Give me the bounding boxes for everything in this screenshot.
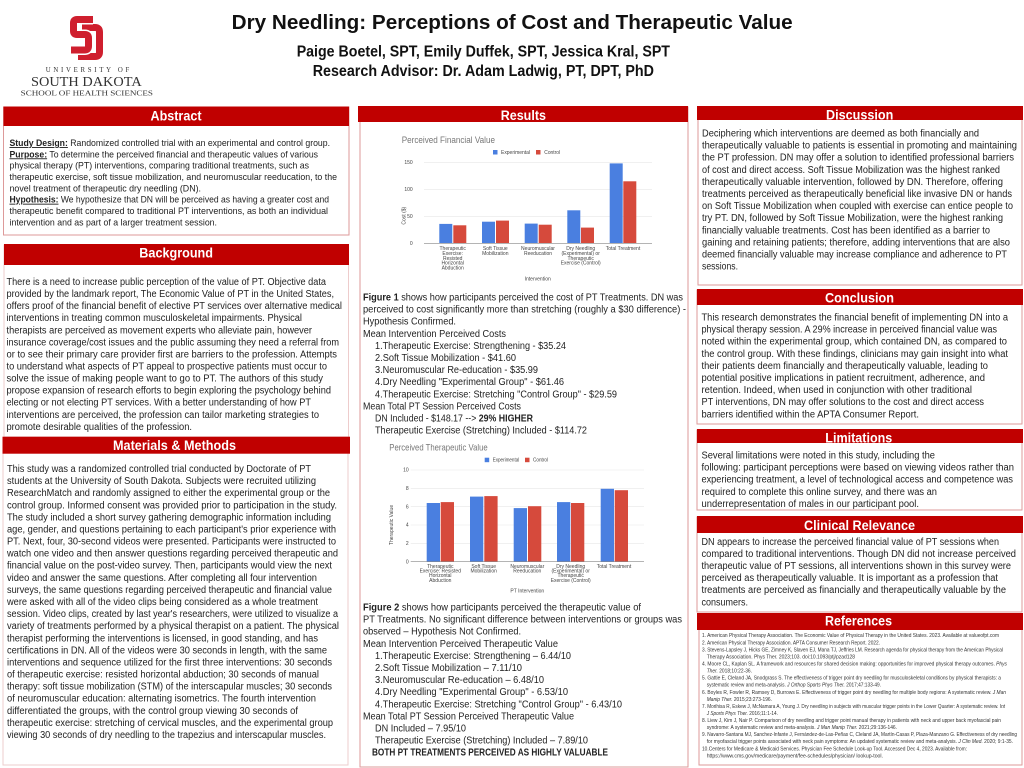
- text: reference list: Therapy Association. Phys Ther. 2023;103. doi:10.1093/ptj/pzad128: [707, 654, 855, 660]
- text: figure 1 description: 4.Therapeutic Exercise: Stretching "Control Group" - $29.59: [375, 389, 617, 400]
- text: discussion body: gaining and retaining patients; therefore, adding interventions that are also: [702, 237, 1011, 248]
- y axis labels: 100: [404, 187, 413, 193]
- text: conclusion body: noted within the experimental group, which contained DN, as compared to: [702, 337, 1008, 348]
- text: background body: There is a need to increase public perception of the value of PT. Objective data: [6, 277, 327, 288]
- text: reference list: [702, 633, 1017, 759]
- x axis labels: (Experimental) or: [562, 251, 600, 257]
- text: limitations body: underrepresentation of males in our participant pool.: [702, 499, 919, 510]
- x axis labels: Therapeutic: [427, 564, 454, 570]
- text: reference list: Ther. 2018;10:22-36.: [707, 669, 752, 675]
- text: methods body: of therapeutic exercise: resisted horizontal abduction; 30 seconds of manual: [7, 670, 319, 680]
- x axis labels: Horizontal: [429, 573, 452, 579]
- text: methods body: interventions and sequence utilized for the first three interventions: 30 seconds: [7, 657, 332, 668]
- text: methods body: therapist performing the interventions is licensed, in good standing, and has: [7, 633, 318, 644]
- text: background body: interventions are perceived, the profession can tailor marketing strategies to: [6, 410, 320, 421]
- heading: background: Background: [139, 245, 213, 260]
- x axis labels: [420, 564, 632, 584]
- y axis labels: 2: [406, 541, 409, 547]
- text: limitations body: Several limitations were noted in this study, including the: [702, 450, 936, 462]
- text: reference list: 4. Moore CL, Kaplan SL. A framework and resources for shared decision making: opportunities for improved physical therapy outcomes. Phys: [702, 662, 1007, 668]
- x axis labels: Soft Tissue: [471, 564, 496, 570]
- x axis labels: Dry Needling: [556, 564, 585, 570]
- text: figure 1 description: 1.Therapeutic Exercise: Strengthening - $35.24: [375, 341, 566, 352]
- text: figure 1 description: Mean Total PT Session Perceived Costs: [363, 401, 521, 412]
- text: methods body: video and answer the same questions. After completing all four intervention: [7, 573, 317, 584]
- text: reference list: 6. Boyles R, Fowler R, Ramsey D, Burrows E. Effectiveness of trigger point dry needling for multiple body regions: A systematic review. J Man: [702, 690, 1006, 696]
- panel: discussion: [697, 106, 1023, 285]
- text: conclusion body: potential positive implications in patient recruitment, adherence, and: [702, 373, 985, 384]
- panel: materials and methods: [2, 437, 350, 765]
- x axis labels: Dry Needling: [566, 246, 595, 252]
- text: background body: to understand what aspects of PT appeal to prospective patients must occur to: [6, 362, 328, 372]
- x axis labels: Therapeutic: [439, 246, 466, 252]
- text: methods body: were asked with all of the video clips being considered as a whole treatment: [6, 597, 318, 608]
- panel: results: [358, 106, 688, 767]
- y axis labels: 0: [406, 559, 409, 565]
- text: figure 2 description: 4.Therapeutic Exercise: Stretching "Control Group" - 6.43/10: [375, 699, 623, 710]
- x axis labels: Mobilization: [470, 569, 497, 575]
- y axis labels: 10: [403, 468, 409, 474]
- x axis labels: Resisted: [443, 256, 463, 262]
- text: discussion body: treatments perceived as therapeutically beneficial like invasive DN or hands: [702, 189, 1012, 200]
- panel: limitations: [697, 429, 1023, 510]
- x axis labels: [439, 246, 641, 272]
- text: conclusion body: barriers identified within the APTA Consumer Report.: [702, 409, 919, 420]
- panel: background: [4, 244, 349, 437]
- logo text: UNIVERSITY OF: [46, 67, 130, 74]
- chart legend: Experimental: [493, 457, 519, 463]
- x axis labels: Horizontal: [441, 261, 464, 267]
- y axis labels: 6: [406, 504, 409, 510]
- text: background body: provided by the landmark report, The Economic Value of PT in the United States,: [6, 289, 334, 300]
- text: methods body: watch one video and then answer questions regarding perceived therapeutic and: [6, 549, 338, 560]
- text: background body: [6, 277, 342, 433]
- text: figure 2 description: 2.Soft Tissue Mobilization – 7.11/10: [375, 663, 523, 674]
- text: reference list: J Sports Phys Ther. 2016;11:1-14.: [706, 711, 778, 717]
- text: clinical relevance body: perceived as therapeutically valuable. It is important as a profession that: [702, 573, 998, 584]
- text: limitations body: [702, 450, 1014, 510]
- text: discussion body: on Soft Tissue Mobilization when coupled with exercise can entice people to: [702, 201, 1014, 212]
- chart title: Perceived Therapeutic Value: [389, 443, 488, 454]
- text: figure 1 description: [363, 292, 686, 437]
- logo text: [21, 67, 153, 97]
- text: clinical relevance body: [702, 537, 1016, 608]
- x axis labels: (Experimental) or: [552, 569, 590, 575]
- text: discussion body: Deciphering which interventions are deemed as both financially and: [702, 128, 979, 140]
- logo: University of South Dakota School of Health Sciences: [21, 20, 153, 97]
- x axis labels: Total Treatment: [597, 564, 632, 570]
- text: background body: propose expansion of research efforts to begin exploring the psychology behind: [6, 386, 331, 397]
- text: discussion body: sessions.: [702, 262, 738, 273]
- text: abstract body: [10, 138, 337, 227]
- x axis labels: Exercise:: [442, 251, 463, 257]
- title: Dry Needling: Perceptions of Cost and Therapeutic Value: [232, 12, 793, 34]
- text: reference list: https://www.cms.gov/medicare/payment/fee-schedules/physician/ lookup-tool.: [707, 753, 883, 759]
- text: methods body: control group. Informed consent was provided prior to participation in the study.: [7, 500, 337, 511]
- text: background body: or to see their primary care provider first are barriers to the profession. Attempts: [6, 349, 337, 360]
- text: figure 2 description: observed – Hypothesis Not Confirmed.: [363, 627, 521, 638]
- y axis title: Cost ($): [402, 206, 408, 225]
- text: discussion body: try PT. DN, followed by Soft Tissue Mobilization, were the highest ranking: [702, 213, 1003, 224]
- text: reference list: Manip Ther. 2015;23:273-196.: [707, 697, 772, 703]
- text: conclusion body: retention. Indeed, when used in conjunction with other traditional: [702, 385, 972, 396]
- text: limitations body: following: participant perceptions were based on viewing videos rather than: [702, 463, 1014, 474]
- x axis title: Intervention: [525, 277, 551, 283]
- text: methods body: variety of treatments performed by a physical therapist on a patient. The physical: [7, 621, 339, 632]
- text: figure 2 description: BOTH PT TREATMENTS PERCEIVED AS HIGHLY VALUABLE: [372, 748, 608, 759]
- text: reference list: 2. American Physical Therapy Association. APTA Consumer Research Report. 2022.: [702, 640, 880, 646]
- text: discussion body: of cost and direct access. Soft Tissue Mobilization was the highest ranked: [702, 165, 1000, 176]
- text: conclusion body: their patients deem financially and therapeutically valuable, leading to: [702, 361, 989, 372]
- x axis labels: Total Treatment: [606, 246, 641, 252]
- text: background body: interventions in treating common musculoskeletal impairments. Physical: [6, 313, 302, 324]
- text: figure 2 description: DN Included – 7.95/10: [375, 724, 467, 734]
- text: discussion body: [702, 128, 1017, 273]
- text: methods body: The study included a short survey gathering demographic information including: [7, 512, 331, 523]
- text: clinical relevance body: therapeutic value of PT sessions, all interventions shown in this survey were: [702, 561, 1012, 572]
- chart bars: [427, 489, 628, 562]
- research advisor: Research Advisor: Dr. Adam Ladwig, PT, DPT, PhD: [313, 63, 654, 80]
- text: methods body: of neuromuscular education: alternating isometrics. The fourth intervention: [7, 694, 316, 705]
- y axis title: Therapeutic Value: [389, 505, 395, 545]
- text: methods body: session. Video clips, created by last year's researchers, were utilized to visualize a: [7, 609, 338, 620]
- text: abstract body: novel treatment of therapeutic dry needling (DN).: [10, 183, 201, 193]
- y axis labels: 150: [404, 160, 413, 166]
- heading: clinical relevance: Clinical Relevance: [804, 518, 915, 533]
- panel: references: [697, 613, 1023, 765]
- text: figure 2 description: PT Treatments. No significant difference between interventions or groups was: [363, 615, 682, 626]
- text: conclusion body: the control group. With these findings, clinicians may gain insight into what: [702, 349, 1008, 360]
- heading: abstract: Abstract: [150, 109, 202, 124]
- text: background body: therapists are perceived as movement experts who alleviate pain, however: [6, 325, 313, 336]
- x axis labels: Therapeutic: [557, 573, 584, 579]
- text: abstract body: intervention and as part of a larger treatment session.: [10, 217, 217, 227]
- text: conclusion body: physical therapy session. A 29% increase in perceived financial value was: [702, 325, 997, 336]
- x axis labels: Neuromuscular: [521, 246, 555, 252]
- text: figure 1 description: 3.Neuromuscular Re-education - $35.99: [375, 365, 538, 376]
- text: abstract body: therapeutic exercise, soft tissue mobilization, and neuromuscular reeducation, to the: [10, 172, 337, 182]
- text: methods body: certifications in DN. All of the videos were 30 seconds in length, with the same: [7, 645, 328, 656]
- icon: SD monogram: [71, 20, 100, 56]
- text: figure 1 description: Therapeutic Exercise (Stretching) Included - $114.72: [375, 426, 587, 437]
- x axis labels: Abduction: [429, 578, 452, 584]
- text: background body: promote desirable qualities of the profession.: [6, 422, 192, 433]
- x axis labels: Abduction: [442, 266, 464, 272]
- text: discussion body: therapeutically valuable intervention, followed by DN. Therefore, offering: [702, 177, 1003, 188]
- text: figure 2 description: [363, 602, 682, 759]
- text: figure 2 description: Figure 2 shows how participants perceived the therapeutic value of: [363, 602, 641, 614]
- x axis labels: Therapeutic: [567, 256, 594, 262]
- panel: conclusion: [697, 289, 1023, 424]
- text: reference list: for myofascial trigger points associated with neck pain symptoms: An updated systematic review and meta-analysis. J Clin Med. 2020; 9:1-35.: [707, 739, 1013, 745]
- heading: references: References: [825, 614, 892, 629]
- text: figure 2 description: 3.Neuromuscular Re-education – 6.48/10: [375, 675, 545, 686]
- x axis labels: Reeducation: [513, 569, 542, 575]
- text: background body: electing or not electing PT services. With a better understanding of how PT: [6, 398, 311, 409]
- text: methods body: PT. Next, four, 30-second videos were presented. Participants were instructed to: [7, 536, 337, 548]
- text: conclusion body: [702, 312, 1009, 420]
- panel: clinical relevance: [697, 516, 1023, 612]
- x axis labels: Exercise: Resisted: [420, 569, 461, 575]
- text: figure 2 description: 4.Dry Needling "Experimental Group" - 6.53/10: [375, 687, 569, 698]
- x axis labels: Reeducation: [524, 251, 552, 257]
- chart legend: Experimental: [501, 150, 530, 156]
- logo text: SOUTH DAKOTA: [31, 74, 142, 89]
- text: reference list: syndrome: A systematic review and meta-analysis. J Man Manip Ther. 2021;29:136-146.: [707, 725, 897, 731]
- y axis labels: [403, 468, 409, 565]
- text: conclusion body: PT interventions, DN may offer solutions to the cost and direct access: [702, 397, 984, 408]
- text: clinical relevance body: DN appears to increase the perceived financial value of PT sessions when: [702, 537, 999, 548]
- text: methods body: therapeutic exercise: stretching of cervical muscles, and the experimental group: [7, 718, 334, 729]
- text: figure 2 description: Therapeutic Exercise (Stretching) Included – 7.89/10: [375, 736, 589, 747]
- text: figure 2 description: Mean Total PT Session Perceived Therapeutic Value: [363, 711, 574, 722]
- heading: conclusion: Conclusion: [825, 290, 894, 305]
- y axis labels: 50: [407, 214, 413, 220]
- text: abstract body: physical therapy (PT) interventions, comparing traditional treatments, such as: [10, 161, 309, 171]
- text: background body: solve the issue of making people want to go to PT. The authors of this study: [6, 374, 323, 385]
- y axis labels: 4: [406, 523, 409, 529]
- text: conclusion body: This research demonstrates the financial benefit of implementing DN into a: [702, 312, 1009, 324]
- text: clinical relevance body: compared to traditional interventions. Though DN did not increase perceived: [702, 549, 1016, 560]
- bar chart: perceived therapeutic value: [389, 443, 644, 595]
- y axis labels: [404, 160, 413, 247]
- text: abstract body: Purpose: To determine the perceived financial and therapeutic values of various: [10, 149, 318, 159]
- heading: limitations: Limitations: [825, 430, 892, 445]
- text: figure 1 description: Hypothesis Confirmed.: [363, 317, 456, 328]
- text: reference list: 10.Centers for Medicare & Medicaid Services. Physician Fee Schedule Look-up Tool. Accessed Dec 4, 2023. Available from:: [702, 746, 967, 752]
- text: clinical relevance body: treatments are perceived as financially and therapeutically valuable by the: [702, 585, 1007, 596]
- text: figure 1 description: 2.Soft Tissue Mobilization - $41.60: [375, 353, 517, 364]
- chart title: Perceived Financial Value: [402, 135, 495, 146]
- text: limitations body: required to complete this online survey, and there was an: [702, 487, 937, 498]
- text: discussion body: therapeutically valuable to patients is essential in promoting and maintaining: [702, 141, 1017, 152]
- text: methods body: financial value on the post-video survey. Then, participants would view the next: [7, 561, 332, 572]
- authors: Paige Boetel, SPT, Emily Duffek, SPT, Jessica Kral, SPT: [297, 44, 670, 61]
- text: background body: insurance coverage/cost issues and the public assuming they need a referral from: [6, 337, 339, 348]
- x axis title: PT Intervention: [510, 589, 544, 595]
- text: methods body: students at the University of South Dakota. Subjects were recruited utilizing: [7, 476, 316, 487]
- chart legend: [485, 457, 548, 463]
- text: methods body: [6, 464, 339, 741]
- heading: materials and methods: Materials & Methods: [113, 438, 236, 453]
- heading: results: Results: [501, 108, 546, 123]
- panel: abstract: [4, 106, 349, 235]
- text: abstract body: Study Design: Randomized controlled trial with an experimental and control group.: [10, 138, 330, 148]
- y axis labels: 0: [410, 241, 413, 247]
- text: reference list: systematic review and meta-analysis. J Orthop Sports Phys Ther. 2017;47:133-49.: [707, 683, 881, 689]
- text: figure 1 description: Mean Intervention Perceived Costs: [363, 329, 506, 340]
- text: figure 2 description: 1.Therapeutic Exercise: Strengthening – 6.44/10: [375, 651, 572, 662]
- text: figure 2 description: Mean Intervention Perceived Therapeutic Value: [363, 639, 559, 650]
- chart bars: [439, 163, 636, 243]
- text: clinical relevance body: consumers.: [702, 597, 748, 608]
- text: methods body: This study was a randomized controlled trial conducted by Doctorate of PT: [7, 464, 311, 475]
- text: abstract body: Hypothesis: We hypothesize that DN will be perceived as having a greater cost and: [10, 195, 329, 205]
- text: abstract body: therapeutic benefit compared to traditional PT interventions, as both an individual: [10, 206, 328, 216]
- logo text: SCHOOL OF HEALTH SCIENCES: [21, 88, 153, 97]
- chart legend: [493, 150, 560, 156]
- text: discussion body: deemed financially valuable may increase compliance and adherence to PT: [702, 250, 1007, 260]
- x axis labels: Exercise (Control): [551, 578, 591, 584]
- text: figure 1 description: perceived to cost significantly more than stretching (roughly a $30 difference) -: [363, 305, 686, 316]
- text: background body: offers proof of the financial benefit of elective PT services over alternative medical: [6, 301, 342, 312]
- text: figure 1 description: DN Included - $148.17 --> 29% HIGHER: [375, 414, 533, 424]
- bar chart: perceived financial value: [402, 135, 652, 283]
- text: discussion body: the PT profession. DN may offer a solution to identified professional barriers: [702, 153, 1014, 164]
- x axis labels: Neuromuscular: [510, 564, 545, 570]
- x axis labels: Mobilization: [482, 251, 509, 257]
- text: methods body: differentiated the groups, with the control group viewing 30 seconds of: [7, 706, 298, 717]
- text: figure 1 description: Figure 1 shows how participants perceived the cost of PT Treatments. DN was: [363, 292, 683, 304]
- text: methods body: ResearchMatch and randomly assigned to either the experimental group or the: [7, 488, 331, 499]
- chart legend: Control: [533, 457, 548, 463]
- text: discussion body: financially valuable treatments. Cost has been identified as a barrier to: [702, 225, 991, 236]
- x axis labels: Soft Tissue: [483, 246, 508, 252]
- text: methods body: age, gender, and questions pertaining to each participant's prior experience with: [7, 524, 336, 536]
- text: methods body: viewing 30 seconds of dry needling to the trapezius and interscapular muscles.: [7, 730, 326, 741]
- text: methods body: surveys, the same questions regarding perceived therapeutic and financial value: [7, 585, 333, 596]
- text: figure 1 description: 4.Dry Needling "Experimental Group" - $61.46: [375, 377, 565, 388]
- text: methods body: therapy: soft tissue mobilization (STM) of the interscapular muscles; 30 seconds: [7, 682, 332, 693]
- heading: discussion: Discussion: [826, 108, 893, 123]
- x axis labels: Exercise (Control): [561, 261, 601, 267]
- y axis labels: 8: [406, 486, 409, 492]
- chart legend: Control: [544, 150, 560, 156]
